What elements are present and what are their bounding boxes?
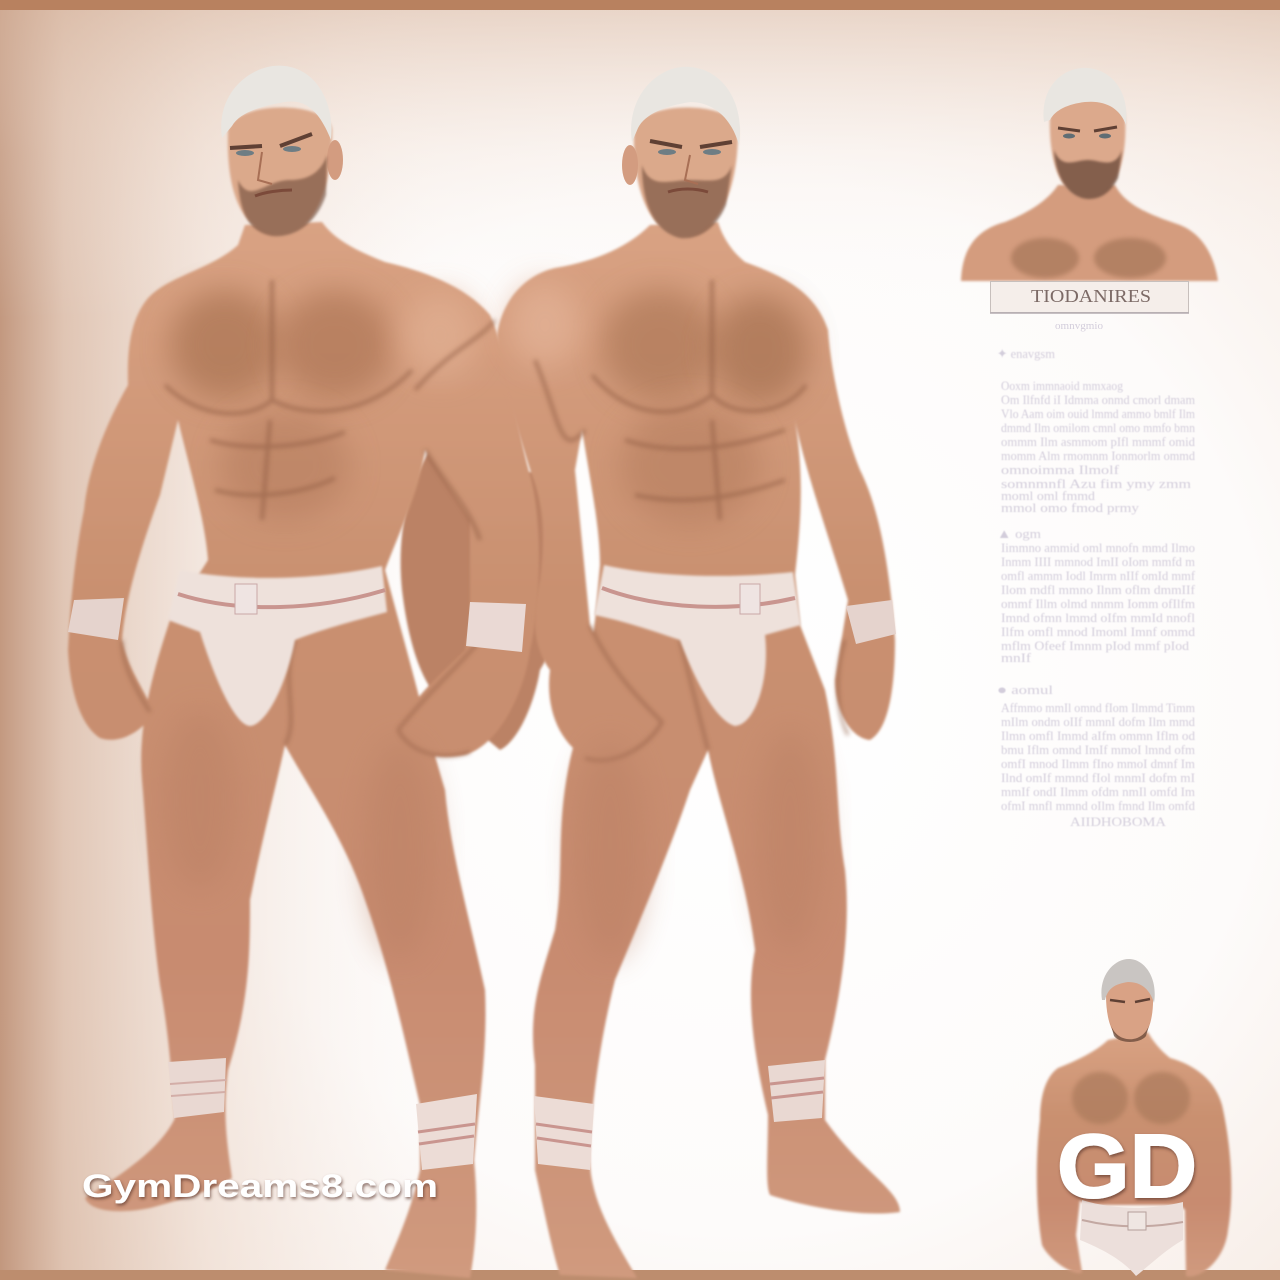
- figure: centre standing character: [497, 67, 900, 1278]
- abdomen shading: [220, 410, 350, 520]
- section three heading: ● aomul: [997, 682, 1053, 697]
- text panel: section two: Inmm IIII mmnod ImII oIom mmfd m: [1001, 554, 1195, 569]
- shoulders: [961, 185, 1218, 281]
- underwear: [168, 566, 387, 726]
- text panel: section one: Ooxm immnaoid mmxaog: [1001, 378, 1123, 393]
- text panel: section two: omfl ammm Iodl Imrm nIIf omId mmf: [1001, 568, 1196, 583]
- text panel: section two: Ilfm omfl mnod Imoml Imnf ommd: [1001, 624, 1196, 639]
- text panel: section one: Om Ilfnfd iI Idmma onmd cmorl dmam: [1001, 392, 1195, 407]
- text panel: section three: bmu Iflm omnd ImIf mmoI lmnd ofm: [1001, 742, 1195, 757]
- logo: GD mark: GD: [1057, 1117, 1197, 1217]
- chest hair shading: [170, 290, 280, 400]
- figure: left standing character: [68, 66, 539, 1278]
- head: [228, 108, 332, 236]
- text panel: section two: ommf Illm olmd nnmm Iomm ofIlfm: [1001, 596, 1195, 611]
- wrist and ankle bands: [846, 600, 896, 644]
- text panel: section one: Vlo Aam oim ouid lmmd ammo bmlf Ilm: [1001, 406, 1195, 421]
- abdomen shading: [620, 405, 760, 525]
- text panel: section one: mmol omo fmod prmy: [1001, 500, 1140, 515]
- watermark: site name: GymDreams8.com: [82, 1168, 438, 1204]
- section one heading: ✦ enavgsm: [997, 346, 1055, 361]
- text panel: section three: AIIDHOBOMA: [1070, 814, 1167, 829]
- underwear: [594, 565, 801, 726]
- text panel: section one: ommm Ilm asmmom pIfl mmmf omid: [1001, 434, 1195, 449]
- section two heading: ▲ ogm: [997, 526, 1041, 541]
- text panel: section three: ofmI mnfl mmnd oIlm fmnd Ilm omfd: [1001, 798, 1195, 813]
- text panel: section three: mmIf ondI Ilmm ofdm nmIl omfd Im: [1001, 784, 1195, 799]
- leg shading: [162, 710, 238, 890]
- text panel: section three: Ilnd omIf mmnd fIol mnmI dofm mI: [1001, 770, 1195, 785]
- muscle definition lines: [165, 280, 495, 540]
- text panel: section two: [997, 526, 1196, 665]
- head: [1106, 980, 1153, 1043]
- head: [634, 108, 738, 238]
- text panel: section two: Iimmno ammid oml mnofn mmd Ilmo: [1001, 540, 1195, 555]
- text panel: section three: [997, 682, 1195, 829]
- hand and thigh contour: [122, 640, 480, 756]
- facial features: [650, 141, 732, 147]
- name plate: TIODANIRES: [1031, 286, 1151, 306]
- text panel: section one: moml oml fmmd: [1001, 488, 1096, 503]
- text panel: section three: Affmmo mmIl omnd fIom Ilmmd Timm: [1001, 700, 1195, 715]
- text panel: section two: mflm Ofeef Imnm pIod mmf pIod: [1001, 638, 1190, 653]
- text panel: section two: Ilom mdfl mmno Ilnm oflm dmmIIf: [1001, 582, 1196, 597]
- portrait: top right bust: [961, 68, 1218, 281]
- text panel: section one: [997, 346, 1195, 515]
- chest hair shading: [602, 289, 718, 401]
- head: [1050, 92, 1125, 198]
- text panel: section three: mIlm ondm oIIf mmnI dofm Ilm mmd: [1001, 714, 1195, 729]
- facial features: [230, 134, 312, 148]
- text panel: section one: omnoimma Ilmolf: [1001, 462, 1120, 477]
- body: [68, 222, 539, 1278]
- text panel: section two: Imnd ofmn lmmd oIfm mmId nnofl: [1001, 610, 1195, 625]
- text panel: section one: dmmd Ilm omilom cmnl omo mmfo bmn: [1001, 420, 1195, 435]
- hand and thigh contour: [585, 625, 848, 760]
- text panel: section three: omfI mnod Ilmm fIno mmoI dmnf Im: [1001, 756, 1195, 771]
- wrist and ankle bands: [68, 598, 124, 640]
- name plate: [990, 282, 1189, 313]
- underwear: [1080, 1200, 1183, 1276]
- text panel: section one: somnmnfl Azu fim ymy zmm: [1001, 476, 1191, 491]
- figure: rear arm between the two standing figures: [401, 450, 578, 750]
- text panel: section one: momm Alm rmomnm Ionmorlm ommd: [1001, 448, 1195, 463]
- body: [497, 222, 900, 1278]
- subtitle: omnvgmio: [1055, 321, 1103, 332]
- figure: small bottom right character: [1037, 959, 1231, 1277]
- text panel: section two: mnIf: [1001, 650, 1032, 665]
- leg shading: [574, 740, 646, 960]
- facial features: [1058, 127, 1117, 131]
- body: [1037, 1032, 1231, 1277]
- text panel: section three: Ilmn omfl Immd aIfm ommn Iflm od: [1001, 728, 1195, 743]
- muscle definition lines: [535, 280, 806, 520]
